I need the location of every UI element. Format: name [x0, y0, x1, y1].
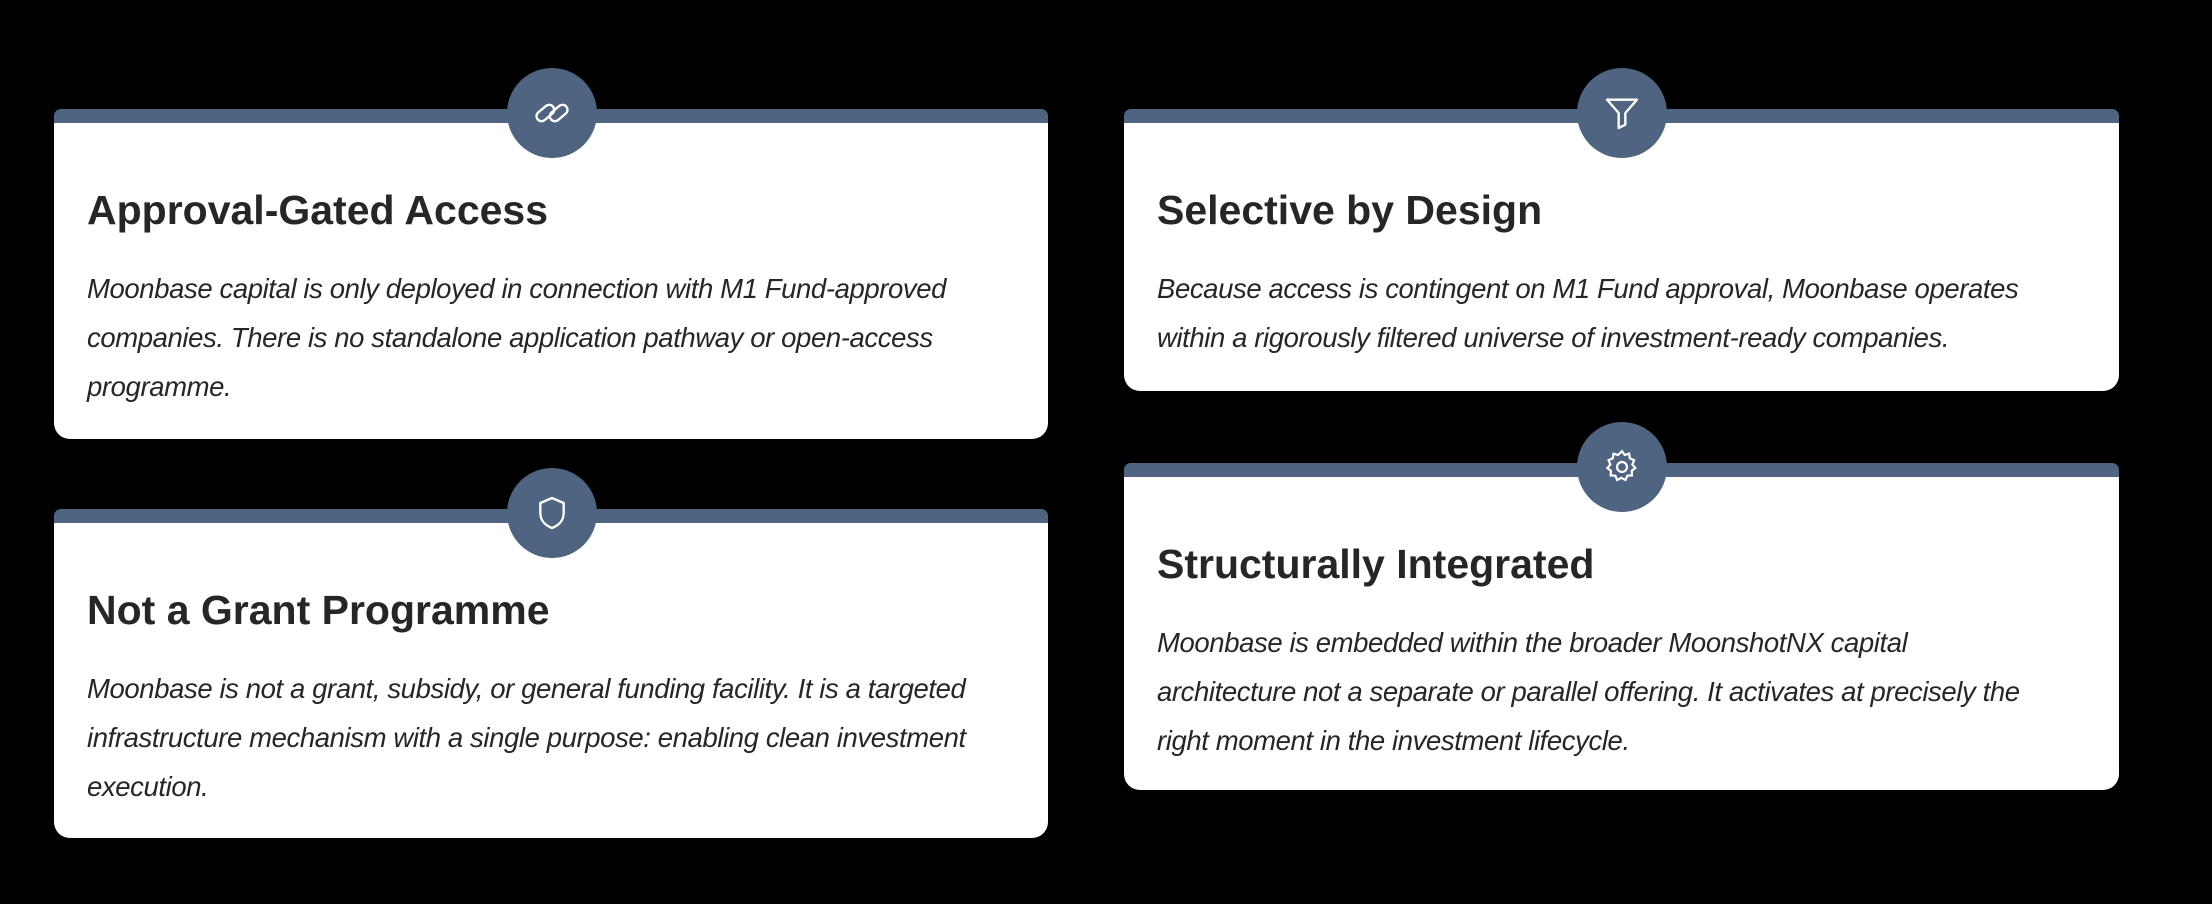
icon: gear	[1577, 422, 1667, 512]
heading: Not a Grant Programme	[87, 587, 550, 633]
icon: shield	[507, 468, 597, 558]
body text	[1157, 627, 2020, 756]
body text: Moonbase capital is only deployed in connection with M1 Fund-approved	[87, 273, 946, 304]
body text: right moment in the investment lifecycle.	[1157, 725, 1630, 756]
body text: execution.	[87, 771, 208, 802]
body text: Moonbase is not a grant, subsidy, or general funding facility. It is a targeted	[87, 673, 965, 704]
card: Structurally Integrated	[1124, 463, 2119, 790]
body text: architecture not a separate or parallel offering. It activates at precisely the	[1157, 676, 2020, 707]
body text: Moonbase is embedded within the broader MoonshotNX capital	[1157, 627, 1907, 658]
body text: infrastructure mechanism with a single purpose: enabling clean investment	[87, 722, 966, 753]
icon: link	[507, 68, 597, 158]
icon: funnel	[1577, 68, 1667, 158]
heading: Selective by Design	[1157, 187, 1542, 233]
body text: companies. There is no standalone application pathway or open-access	[87, 322, 933, 353]
card: Approval-Gated Access	[54, 109, 1048, 439]
body text: Because access is contingent on M1 Fund approval, Moonbase operates	[1157, 273, 2018, 304]
heading: Approval-Gated Access	[87, 187, 548, 233]
body text	[1157, 273, 2018, 353]
body text: programme.	[87, 371, 231, 402]
body text: within a rigorously filtered universe of investment-ready companies.	[1157, 322, 1949, 353]
body text	[86, 273, 948, 402]
body text	[87, 673, 968, 802]
card: Selective by Design	[1124, 109, 2119, 391]
heading: Structurally Integrated	[1157, 541, 1594, 587]
card: Not a Grant Programme	[54, 509, 1048, 838]
